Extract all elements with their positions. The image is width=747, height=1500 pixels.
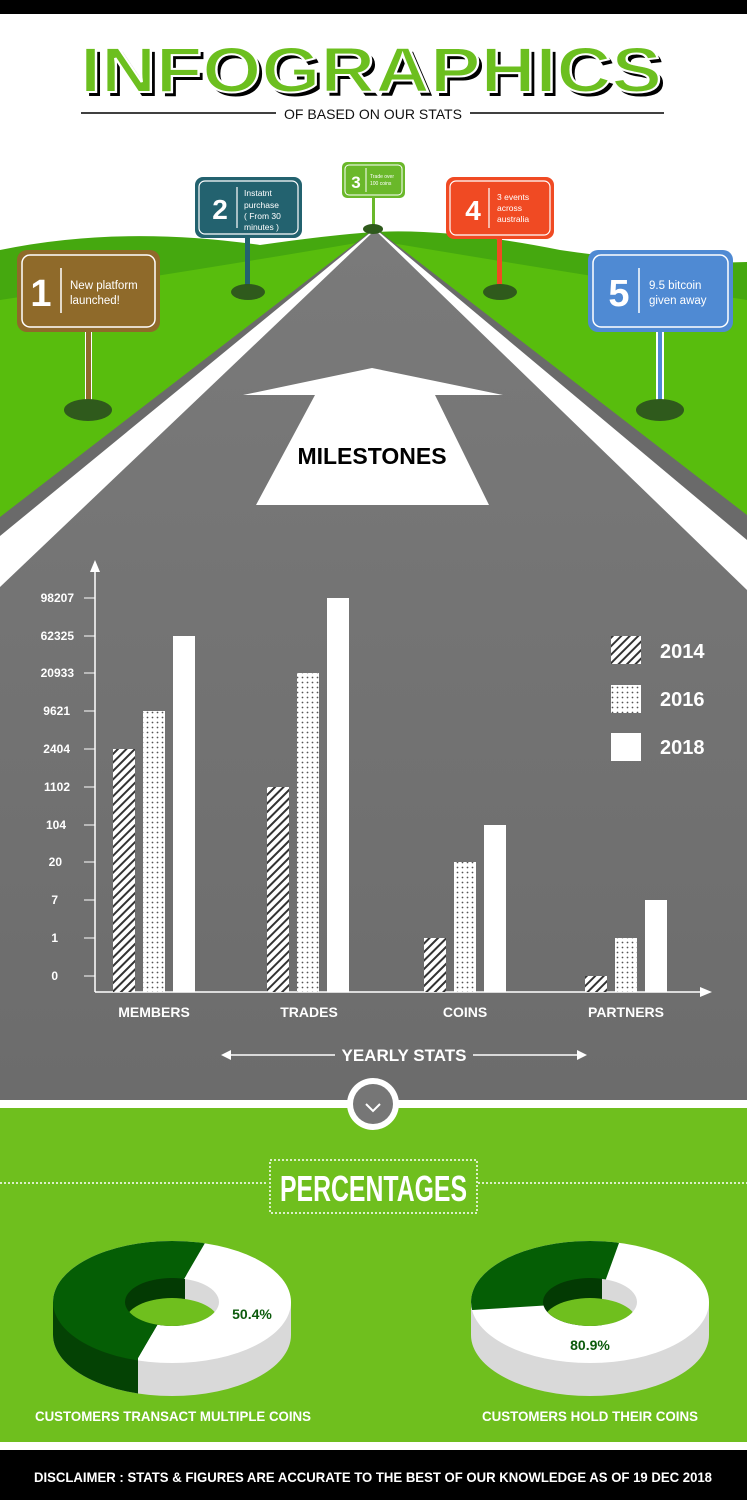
arrow: milestones: MILESTONES <box>297 443 447 469</box>
sign 5: 9.5 bitcoin <box>649 280 701 292</box>
caption right: CUSTOMERS HOLD THEIR COINS <box>482 1408 698 1424</box>
sign 2: minutes ) <box>244 222 279 232</box>
title: INFOGRAPHICS <box>80 34 662 106</box>
bar chart: COINS <box>443 1004 487 1020</box>
legend: 2014 <box>660 641 705 663</box>
sign 2: purchase <box>244 200 279 210</box>
sign 1: New platform <box>70 280 138 292</box>
sign 1: 1 <box>30 273 52 315</box>
bar chart: 20 <box>49 855 62 869</box>
legend: 2016 <box>660 689 704 711</box>
bar chart: 9621 <box>43 704 70 718</box>
disclaimer bar: DISCLAIMER : STATS & FIGURES ARE ACCURATE TO THE BEST OF OUR KNOWLEDGE AS OF 19 DEC 2018 <box>34 1469 712 1485</box>
bar chart: 0 <box>51 969 58 983</box>
legend: 2018 <box>660 737 704 759</box>
disclaimer bar <box>0 1450 747 1500</box>
donut: left: 50.4% <box>232 1306 272 1322</box>
bar chart: 1 <box>51 931 58 945</box>
bar chart: TRADES <box>280 1004 338 1020</box>
sign 2: ( From 30 <box>244 211 281 221</box>
sign 5: given away <box>649 295 707 307</box>
sign 4 <box>446 177 554 300</box>
heading: percentages <box>0 1160 747 1213</box>
legend <box>611 636 705 761</box>
sign 5: 5 <box>608 273 630 315</box>
heading: percentages: PERCENTAGES <box>280 1168 467 1209</box>
sign 4: australia <box>497 214 529 224</box>
donut: right <box>471 1241 709 1396</box>
bar chart: PARTNERS <box>588 1004 664 1020</box>
road <box>0 232 747 1100</box>
sign 3: Trade over <box>370 174 394 180</box>
sign 2: 2 <box>212 194 228 225</box>
bar chart: 62325 <box>41 629 74 643</box>
arrow: milestones <box>243 368 503 505</box>
bar chart: 20933 <box>41 666 74 680</box>
title: INFOGRAPHICS <box>84 38 666 110</box>
sign 4: across <box>497 203 522 213</box>
bar chart <box>41 560 712 1020</box>
bar chart: 1102 <box>44 780 70 794</box>
bar chart: 2404 <box>43 742 70 756</box>
yearly stats: YEARLY STATS <box>341 1046 467 1065</box>
sign 3 <box>342 162 405 234</box>
donut: right: 80.9% <box>570 1337 610 1353</box>
sign 5 <box>588 250 733 421</box>
percentages section <box>0 1100 747 1108</box>
chevron <box>347 1078 399 1130</box>
yearly stats <box>221 1046 587 1065</box>
donut: left <box>53 1241 291 1396</box>
bar chart: 98207 <box>41 591 74 605</box>
sign 1 <box>17 250 160 421</box>
sign 1: launched! <box>70 295 120 307</box>
bar chart: 7 <box>51 893 58 907</box>
sign 3: 100 coins <box>370 181 392 187</box>
sign 4: 4 <box>465 195 481 226</box>
sign 4: 3 events <box>497 192 529 202</box>
sign 2: Instatnt <box>244 188 273 198</box>
caption left: CUSTOMERS TRANSACT MULTIPLE COINS <box>35 1408 311 1424</box>
hills <box>0 231 747 560</box>
sign 2 <box>195 177 302 300</box>
subtitle: OF BASED ON OUR STATS <box>284 106 462 122</box>
bar chart: MEMBERS <box>118 1004 190 1020</box>
sign 3: 3 <box>351 173 361 192</box>
top black bar <box>0 0 747 14</box>
bar chart: 104 <box>46 818 66 832</box>
